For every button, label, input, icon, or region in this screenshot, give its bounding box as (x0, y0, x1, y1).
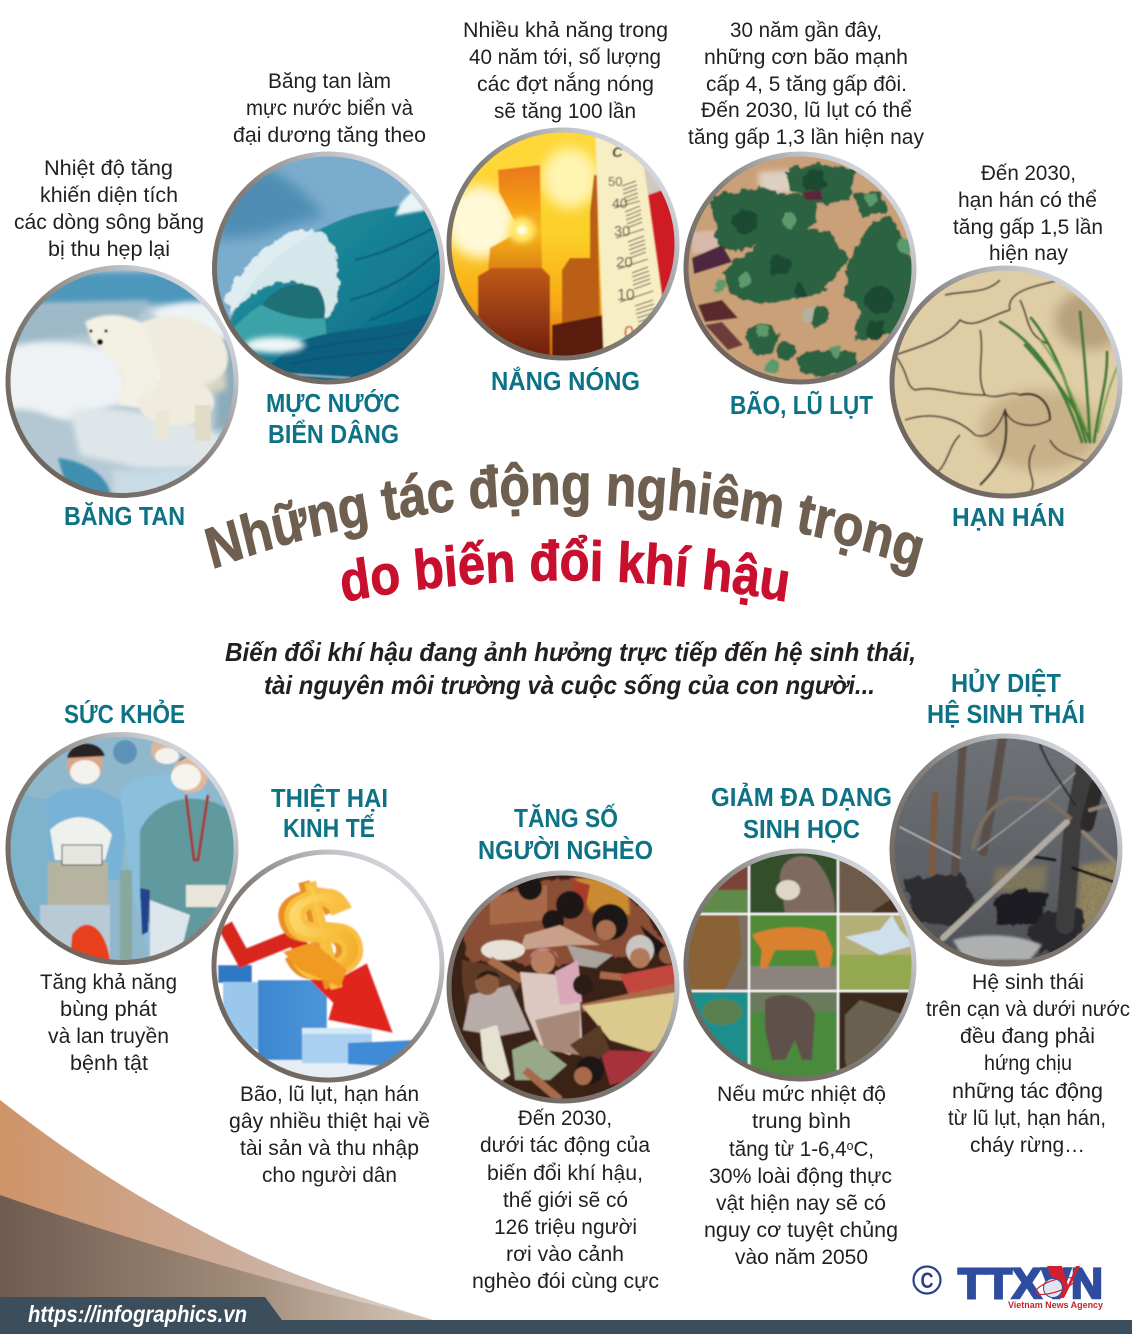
photo grid: wildlife species (688, 854, 912, 1076)
photo: heat city and thermometer: 0 (624, 323, 634, 343)
text: bão lũ description: Đến 2030, lũ lụt có thể (701, 98, 912, 122)
text: băng tan description: Nhiệt độ tăng (44, 156, 173, 180)
text: đa dạng description: vật hiện nay sẽ có (716, 1191, 886, 1215)
footer decoration: corner waves (0, 1100, 433, 1320)
text: người nghèo description: nghèo đói cùng cực (472, 1269, 659, 1293)
label: băng tan: BĂNG TAN (64, 501, 185, 531)
ring: hạn hán (892, 268, 1120, 496)
text: sức khỏe description: bệnh tật (70, 1051, 148, 1075)
photo: heat city and thermometer (452, 132, 674, 356)
text: nắng nóng description (463, 18, 668, 123)
text: đa dạng description: o (847, 1138, 853, 1153)
label: mực nước biển dâng (266, 388, 400, 449)
panel: TĂNG SỐ NGƯỜI NGHÈO (445, 803, 685, 1293)
ring: đa dạng (686, 851, 914, 1079)
text: mực nước biển description: đại dương tăng theo (233, 123, 426, 147)
intro text (225, 637, 916, 700)
text: mực nước biển description: Băng tan làm (268, 69, 391, 93)
text: thiệt hại description: tài sản và thu nhập (240, 1136, 419, 1160)
label: hủy diệt hệ sinh thái: HỆ SINH THÁI (927, 699, 1085, 729)
label: bão lũ lụt: BÃO, LŨ LỤT (730, 390, 873, 420)
ring: sức khỏe (8, 734, 236, 962)
label: tăng số người nghèo: TĂNG SỐ (514, 803, 618, 833)
label: sức khỏe: SỨC KHỎE (64, 698, 185, 729)
text: đa dạng description: tăng từ 1-6,4 (729, 1137, 852, 1161)
photo: heat city and thermometer: 10 (617, 287, 635, 304)
text: sức khỏe description: bùng phát (60, 997, 157, 1021)
text: đa dạng description (704, 1082, 898, 1269)
text: người nghèo description (472, 1106, 659, 1293)
illustration: dollar, bars and falling arrow: $ (271, 857, 375, 1013)
title line 1: Những tác động nghiêm trọng (204, 462, 924, 578)
text: người nghèo description: Đến 2030, (518, 1106, 612, 1130)
ring: nắng nóng (449, 130, 677, 358)
text: hệ sinh thái description: Hệ sinh thái (972, 970, 1084, 994)
text: người nghèo description: thế giới sẽ có (503, 1188, 628, 1212)
label: mực nước biển dâng: BIỂN DÂNG (268, 419, 399, 449)
footer bar (0, 1297, 1132, 1334)
photo: heat city and thermometer: 20 (616, 254, 633, 271)
label: giảm đa dạng sinh học: GIẢM ĐA DẠNG (711, 782, 892, 812)
text: nắng nóng description: Nhiều khả năng trong (463, 18, 668, 42)
text: người nghèo description: dưới tác động của (480, 1133, 650, 1157)
label: thiệt hại kinh tế: KINH TẾ (283, 813, 375, 843)
photo: polar bears on ice (10, 270, 234, 493)
text: đa dạng description: 30% loài động thực (709, 1164, 892, 1188)
grid row 3 (692, 991, 908, 1076)
label: tăng số người nghèo: NGƯỜI NGHÈO (478, 835, 653, 865)
text: hệ sinh thái description: đều đang phải (960, 1024, 1095, 1048)
intro text: tài nguyên môi trường và cuộc sống của con người... (264, 670, 875, 700)
label: hủy diệt hệ sinh thái (927, 667, 1085, 729)
text: đa dạng description: nguy cơ tuyệt chủng (704, 1218, 898, 1242)
text: hệ sinh thái description: từ lũ lụt, hạn hán, (948, 1106, 1106, 1130)
illustration: dollar, bars and falling arrow (217, 879, 412, 1078)
text: bão lũ description: tăng gấp 1,3 lần hiện nay (688, 125, 924, 149)
label: giảm đa dạng sinh học: SINH HỌC (743, 814, 860, 844)
label: hạn hán: HẠN HÁN (952, 502, 1065, 532)
ring: mực nước (214, 154, 442, 382)
text: nắng nóng description: các đợt nắng nóng (477, 71, 654, 96)
photo: burnt forest (894, 738, 1118, 962)
text: sức khỏe description: và lan truyền (48, 1024, 169, 1048)
footer url: https://infographics.vn (28, 1301, 247, 1327)
intro text: Biến đổi khí hậu đang ảnh hưởng trực tiếp đến hệ sinh thái, (225, 637, 916, 667)
text: hệ sinh thái description: hứng chịu (984, 1051, 1072, 1075)
photo: flooded village (688, 156, 912, 380)
panel: BĂNG TAN (0, 156, 245, 531)
photo: heat city and thermometer: C (612, 144, 624, 161)
text: hạn hán description: Đến 2030, (981, 161, 1076, 185)
text: người nghèo description: biến đổi khí hậu, (487, 1161, 643, 1185)
ring: băng tan (8, 268, 236, 496)
text: hệ sinh thái description: cháy rừng… (970, 1133, 1085, 1157)
text: hệ sinh thái description: những tác động (952, 1079, 1103, 1103)
label: giảm đa dạng sinh học (711, 782, 892, 844)
panel: MỰC NƯỚC BIỂN DÂNG (205, 69, 450, 449)
text: thiệt hại description (229, 1082, 430, 1187)
text: băng tan description (14, 156, 204, 261)
title (204, 462, 924, 606)
text: hạn hán description: hiện nay (989, 241, 1068, 265)
text: bão lũ description: những cơn bão mạnh (704, 45, 908, 69)
label: mực nước biển dâng: MỰC NƯỚC (266, 388, 400, 418)
logo: TTXVN: C (920, 1268, 934, 1293)
title line 2: do biến đổi khí hậu (342, 534, 788, 606)
text: thiệt hại description: Bão, lũ lụt, hạn hán (240, 1082, 419, 1106)
panel: HẠN HÁN (885, 161, 1130, 532)
label: nắng nóng: NẮNG NÓNG (491, 366, 640, 396)
text: nắng nóng description: sẽ tăng 100 lần (494, 99, 636, 123)
logo: TTXVN (914, 1260, 1104, 1311)
ring: người nghèo (449, 873, 677, 1101)
text: hạn hán description: hạn hán có thể (958, 188, 1097, 212)
text: bão lũ description: 30 năm gần đây, (730, 18, 882, 42)
text: mực nước biển description (233, 69, 426, 147)
panel: SỨC KHỎE (5, 698, 245, 1075)
panel: GIẢM ĐA DẠNG SINH HỌC (680, 782, 920, 1269)
text: người nghèo description: rơi vào cảnh (506, 1242, 624, 1266)
text: bão lũ description: cấp 4, 5 tăng gấp đôi. (706, 72, 907, 96)
text: hạn hán description (953, 161, 1103, 265)
text: hạn hán description: tăng gấp 1,5 lần (953, 215, 1103, 239)
photo: cracked earth with grass (894, 270, 1118, 494)
ring: hệ sinh thái (892, 736, 1120, 964)
text: thiệt hại description: cho người dân (262, 1163, 397, 1187)
label: thiệt hại kinh tế (271, 783, 388, 843)
photo: crowd of poor people (452, 876, 674, 1098)
label: thiệt hại kinh tế: THIỆT HẠI (271, 783, 388, 813)
label: hủy diệt hệ sinh thái: HỦY DIỆT (951, 667, 1061, 698)
text: mực nước biển description: mực nước biển và (246, 96, 413, 120)
logo: TTXVN: Vietnam News Agency (1008, 1300, 1104, 1311)
photo: heat city and thermometer: 30 (614, 224, 630, 240)
label: tăng số người nghèo (478, 803, 653, 865)
grid row 2 (680, 915, 919, 990)
text: băng tan description: bị thu hẹp lại (48, 237, 170, 261)
text: thiệt hại description: gây nhiều thiệt hại về (229, 1109, 430, 1133)
text: người nghèo description: 126 triệu người (494, 1215, 637, 1239)
panel: HỦY DIỆT HỆ SINH THÁI (885, 667, 1130, 1157)
ring: bão lũ (686, 154, 914, 382)
photo: heat city and thermometer: 50 (608, 174, 622, 189)
photo: medical staff in masks (10, 737, 234, 960)
ring: thiệt hại (214, 852, 442, 1080)
photo: ocean wave (217, 156, 440, 380)
text: sức khỏe description (40, 970, 177, 1075)
photo: heat city and thermometer: 40 (612, 195, 628, 211)
panel: BÃO, LŨ LỤT (680, 18, 924, 420)
text: đa dạng description: vào năm 2050 (735, 1245, 868, 1269)
panel: NẮNG NÓNG (445, 18, 685, 396)
logo: TTXVN: TTXVN (958, 1260, 1103, 1308)
text: băng tan description: các dòng sông băng (14, 210, 204, 234)
text: nắng nóng description: 40 năm tới, số lượng (469, 45, 661, 69)
grid row 1 (701, 854, 899, 914)
illustration: dollar, bars and falling arrow: $ (265, 856, 368, 1012)
text: hệ sinh thái description (926, 970, 1130, 1157)
text: băng tan description: khiến diện tích (40, 183, 178, 207)
text: đa dạng description: C, (853, 1137, 874, 1161)
text: đa dạng description: Nếu mức nhiệt độ (717, 1082, 886, 1106)
panel: THIỆT HẠI KINH TẾ (205, 783, 450, 1187)
text: bão lũ description (688, 18, 924, 149)
text: sức khỏe description: Tăng khả năng (40, 970, 177, 994)
text: đa dạng description: trung bình (752, 1109, 851, 1133)
